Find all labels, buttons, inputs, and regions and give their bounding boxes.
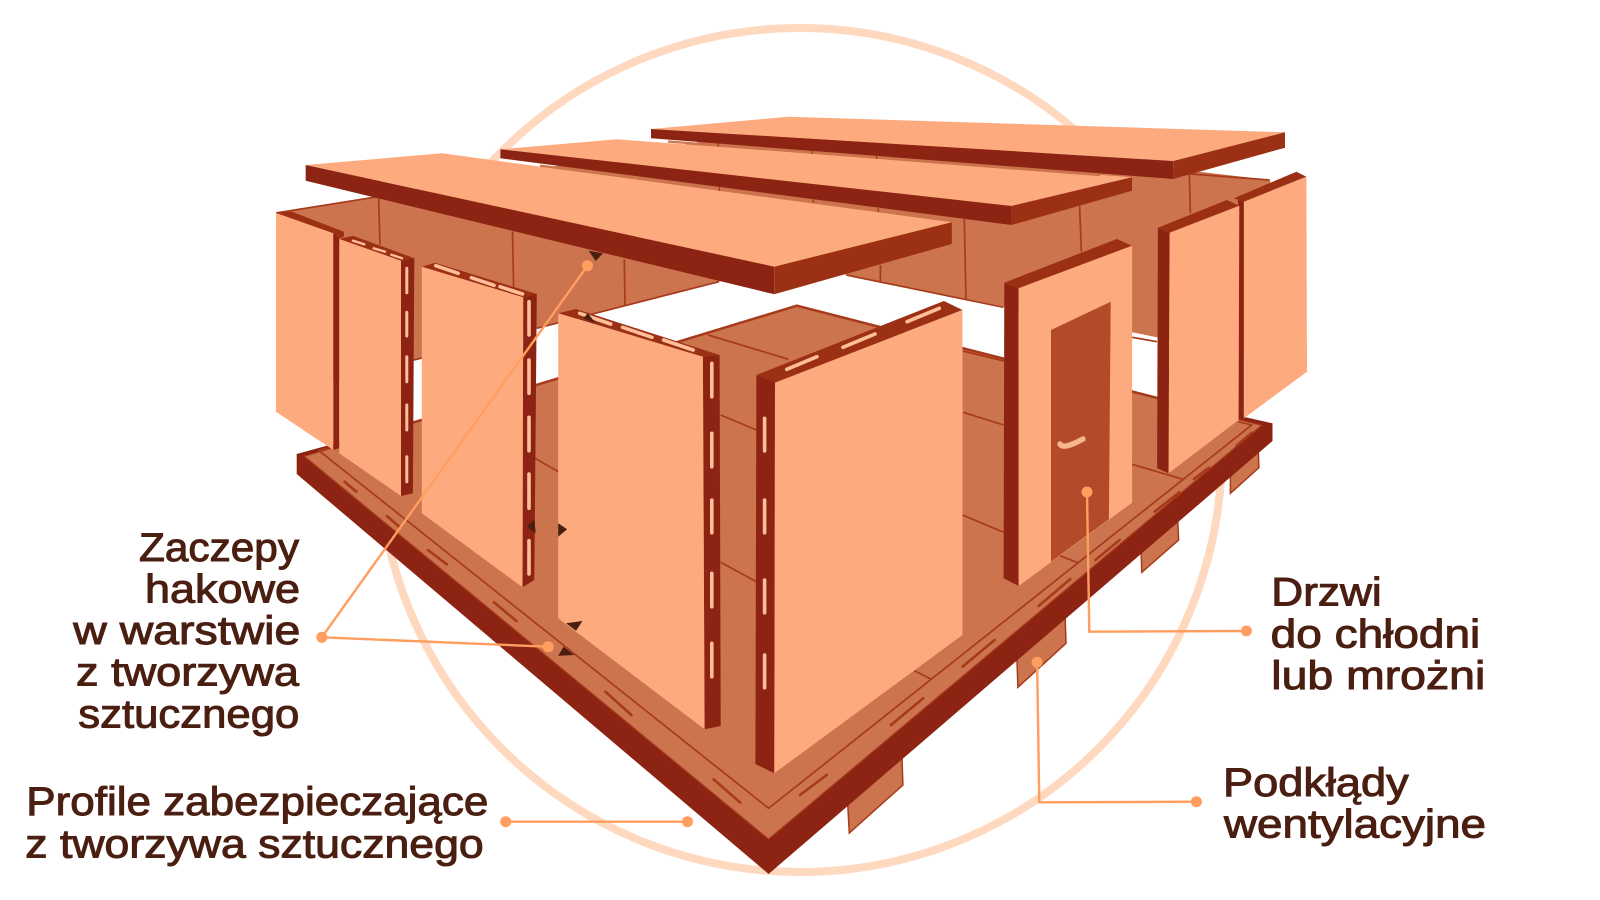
label: door: Drzwi	[1271, 571, 1382, 615]
label: hooks: Zaczepy	[139, 526, 299, 570]
callout leader: door	[1082, 486, 1252, 636]
callout leader: sleepers	[1032, 657, 1202, 807]
label: hooks	[72, 526, 300, 737]
label: sleepers: wentylacyjne	[1223, 802, 1486, 846]
label: sleepers	[1223, 761, 1486, 846]
callout leader: profiles	[500, 816, 693, 827]
roof plank: front	[306, 153, 952, 294]
label: hooks: w warstwie	[72, 609, 300, 653]
hook under front plank	[589, 251, 603, 261]
door handle	[1060, 439, 1083, 446]
ceiling underside	[276, 125, 1295, 395]
wall panel: far left	[276, 212, 344, 450]
wall panel: left second	[339, 236, 414, 496]
roof plank: back	[651, 117, 1285, 179]
ceiling slivers showing between planks	[540, 142, 1100, 219]
callout leader: hooks	[316, 260, 593, 652]
label: hooks: sztucznego	[78, 693, 299, 737]
label: door: lub mrożni	[1271, 654, 1485, 698]
roof plank: middle	[500, 139, 1132, 225]
label: profiles	[25, 780, 488, 866]
label: door	[1271, 571, 1485, 698]
label: door: do chłodni	[1271, 612, 1480, 656]
wall panel: large front left	[558, 309, 721, 729]
background circle	[378, 28, 1222, 872]
wall panel: right	[1157, 200, 1239, 473]
wall panel: large front right	[755, 301, 962, 773]
floor base platform	[297, 306, 1272, 874]
label: profiles: Profile zabezpieczające	[26, 780, 488, 824]
wall panel: left third	[422, 263, 537, 587]
label: hooks: hakowe	[145, 568, 300, 612]
label: profiles: z tworzywa sztucznego	[25, 822, 484, 866]
ventilation sleepers under the pallet	[848, 447, 1259, 833]
label: hooks: z tworzywa	[76, 651, 300, 695]
hook anchors	[527, 313, 596, 656]
label: sleepers: Podkłądy	[1223, 761, 1409, 805]
wall panel: far right	[1234, 172, 1307, 420]
wall panel with door	[1004, 239, 1132, 586]
door	[1051, 302, 1111, 562]
